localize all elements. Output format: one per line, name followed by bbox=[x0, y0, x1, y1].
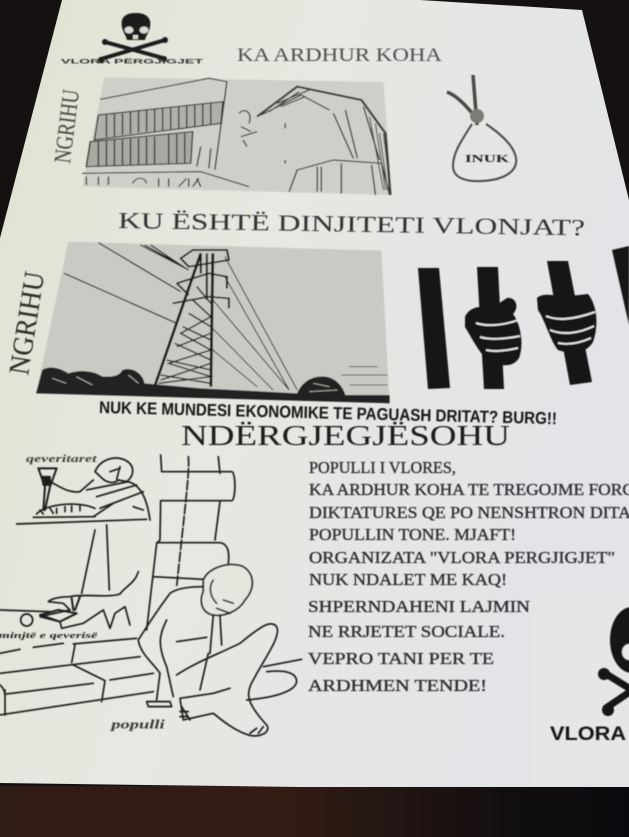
people label: populli bbox=[110, 718, 165, 732]
table wood at bottom bbox=[0, 786, 629, 837]
label: ngrihu 2: NGRIHU bbox=[3, 269, 51, 377]
steps bbox=[0, 610, 153, 715]
message text block: DIKTATURES QE PO NENSHTRON DITA bbox=[309, 503, 629, 522]
hand right bbox=[537, 294, 596, 353]
lighter patch behind lower logo bbox=[535, 598, 629, 784]
heading: ka ardhur koha: KA ARDHUR KOHA bbox=[237, 46, 443, 66]
message text block: VEPRO TANI PER TE bbox=[308, 649, 494, 668]
cartoon: government feasting over the people bbox=[0, 454, 302, 736]
message text block bbox=[308, 458, 629, 695]
message text block: ORGANIZATA "VLORA PERGJIGJET" bbox=[309, 548, 615, 567]
wall bbox=[147, 455, 235, 630]
noose label: INUK bbox=[465, 153, 510, 165]
logo caption: VLORA PËRGJIGJET bbox=[61, 58, 203, 66]
government label: qeveritaret bbox=[26, 454, 98, 465]
message text block: NUK NDALET ME KAQ! bbox=[309, 570, 507, 589]
photo: electricity pylon bbox=[36, 242, 390, 403]
dog label: minjtë e qeverisë bbox=[0, 631, 98, 640]
hand left bbox=[465, 298, 521, 365]
heading: ndergjegjesohu: NDËRGJEGJËSOHU bbox=[181, 420, 510, 452]
icon: noose with INUK tag bbox=[447, 75, 516, 181]
logo: skull and crossbones bottom bbox=[550, 607, 629, 745]
seated man bbox=[138, 565, 302, 736]
message text block: POPULLI I VLORES, bbox=[309, 458, 456, 477]
message text block: NE RRJETET SOCIALE. bbox=[308, 622, 505, 641]
caption: economic warning: NUK KE MUNDESI EKONOMIKE TE PAGUASH DRITAT? BURG!! bbox=[99, 398, 557, 428]
heading: ku eshte dinjiteti vlonjat: KU ËSHTË DINJITETI VLONJAT? bbox=[118, 208, 585, 240]
message text block: SHPERNDAHENI LAJMIN bbox=[308, 597, 530, 616]
photo: excavator demolishing building bbox=[82, 77, 392, 195]
dog bbox=[21, 572, 138, 628]
logo caption bottom: VLORA bbox=[550, 724, 626, 745]
message text block: ARDHMEN TENDE! bbox=[308, 676, 487, 695]
logo: skull and crossbones top bbox=[61, 13, 203, 66]
message text block: KA ARDHUR KOHA TE TREGOJME FORC bbox=[309, 480, 629, 499]
message text block: POPULLIN TONE. MJAFT! bbox=[309, 525, 516, 544]
ruler figure and table bbox=[17, 458, 150, 593]
icon: prison bars with hands bbox=[418, 246, 629, 389]
label: ngrihu 1: NGRIHU bbox=[50, 88, 85, 165]
